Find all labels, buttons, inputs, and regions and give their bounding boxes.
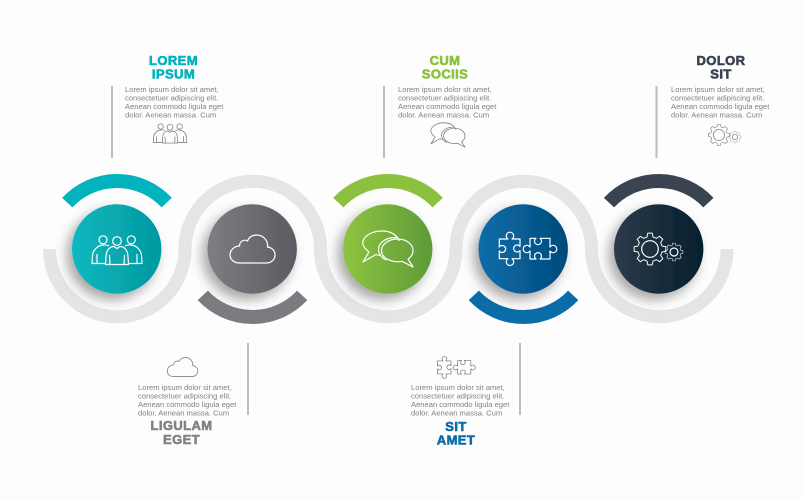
text block: Aenean commodo ligula eget (398, 102, 497, 111)
leader line (656, 86, 658, 158)
step 4 accent arc: blue (474, 295, 573, 317)
icon: people (92, 236, 142, 264)
leader line (519, 343, 521, 415)
text block: consectetuer adipiscing elit. (411, 392, 504, 400)
leader line (111, 86, 113, 158)
heading: cum sociis: SOCIIS (422, 66, 468, 82)
icon: small people (153, 124, 187, 143)
text block: Lorem ipsum dolor sit amet, (398, 85, 492, 94)
text block: consectetuer adipiscing elit. (138, 392, 231, 400)
step 3 accent arc: green (338, 181, 438, 203)
step 2 circle with cloud icon (208, 204, 297, 294)
text block: Lorem ipsum dolor sit amet, (411, 383, 505, 392)
panel: ligulam eget (138, 343, 249, 447)
icon: small cloud (167, 357, 198, 377)
step 1 accent arc: teal (67, 181, 167, 203)
icon: puzzle pieces (499, 232, 557, 266)
panel: lorem ipsum (111, 53, 224, 158)
text block: dolor. Aenean massa. Cum (125, 110, 216, 120)
heading: ligulam eget: EGET (163, 432, 200, 447)
leader line (247, 343, 249, 415)
step 5 accent arc: dark (609, 181, 708, 203)
panel: cum sociis (383, 53, 497, 158)
text block: Lorem ipsum dolor sit amet, (138, 383, 232, 392)
icon: cloud (230, 235, 275, 263)
text block: Aenean commodo ligula eget (138, 400, 237, 409)
text block: Aenean commodo ligula eget (125, 102, 224, 111)
heading: sit amet: SIT (445, 419, 467, 434)
heading: cum sociis: CUM (430, 53, 460, 68)
step 4 circle with puzzle icon (478, 204, 568, 294)
step 5 circle with gears icon (614, 204, 703, 294)
step 2 accent arc: grey (203, 295, 302, 317)
text block: Lorem ipsum dolor sit amet, (125, 85, 219, 94)
text block: dolor. Aenean massa. Cum (398, 110, 489, 120)
text block: dolor. Aenean massa. Cum (671, 110, 762, 120)
heading: dolor sit: DOLOR (697, 53, 746, 68)
heading: lorem ipsum: IPSUM (152, 66, 195, 82)
step 1 circle with people icon (72, 204, 161, 294)
panel: dolor sit (656, 53, 770, 158)
icon: small chat bubbles (431, 123, 465, 147)
grey wave ribbon (50, 181, 727, 317)
icon: gears (634, 233, 683, 265)
text block: consectetuer adipiscing elit. (125, 94, 218, 102)
icon: chat bubbles (363, 231, 413, 267)
icon: small puzzle pieces (437, 356, 475, 378)
panel: sit amet (411, 343, 521, 448)
text block: Aenean commodo ligula eget (671, 102, 770, 111)
text block: Aenean commodo ligula eget (411, 400, 510, 409)
text block: consectetuer adipiscing elit. (398, 94, 491, 102)
icon: small gears (708, 124, 741, 146)
step 3 circle with chat icon (343, 204, 432, 294)
heading: sit amet: AMET (437, 432, 475, 448)
text block: Lorem ipsum dolor sit amet, (671, 85, 765, 94)
text block: dolor. Aenean massa. Cum (138, 408, 229, 418)
leader line (383, 86, 385, 158)
text block: consectetuer adipiscing elit. (671, 94, 764, 102)
heading: ligulam eget: LIGULAM (150, 418, 213, 433)
heading: lorem ipsum: LOREM (149, 53, 198, 68)
text block: dolor. Aenean massa. Cum (411, 408, 502, 418)
heading: dolor sit: SIT (710, 66, 732, 82)
